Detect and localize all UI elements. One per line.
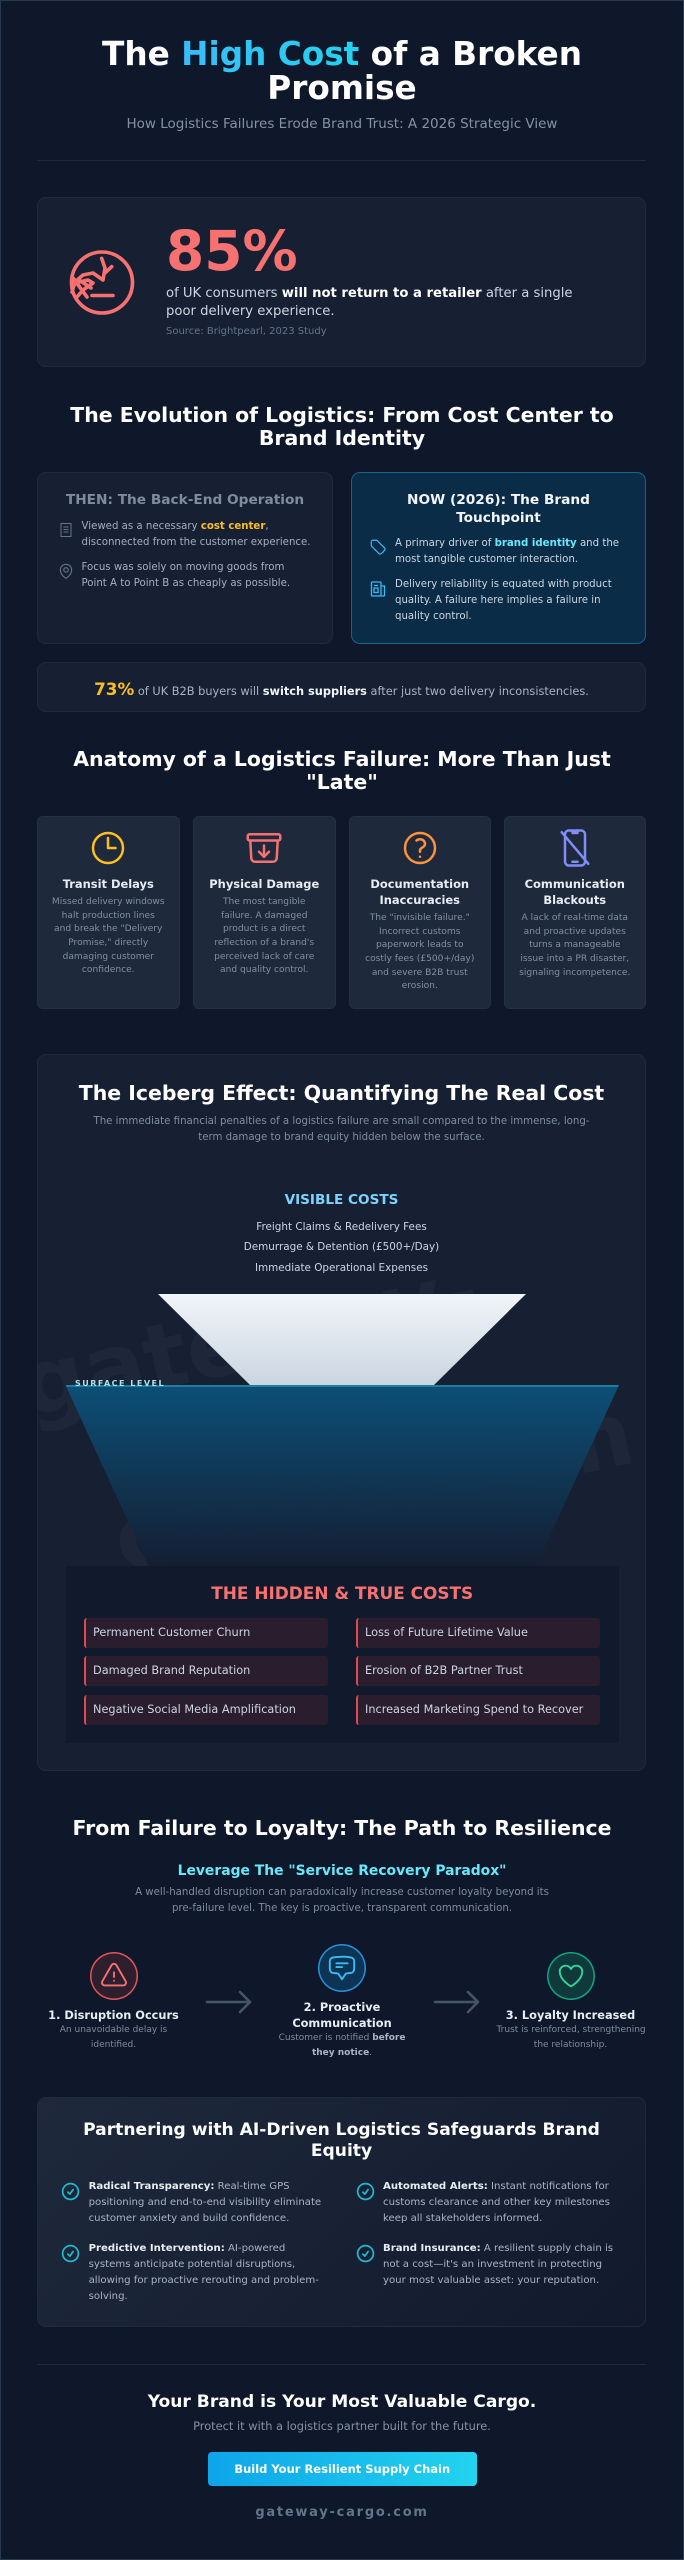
card text: signaling incompetence. [519, 968, 630, 978]
card: transit delays [37, 816, 180, 1009]
then item 1: Viewed as a necessary cost center, [82, 520, 269, 532]
then heading: THEN: The Back-End Operation [66, 492, 304, 508]
card title: Physical Damage [209, 877, 319, 891]
now heading [407, 492, 590, 526]
icon: heart [546, 1952, 594, 2000]
73% statement: 73% of UK B2B buyers will switch suppliers after just two delivery inconsistencies. [94, 679, 589, 699]
hidden cost item [356, 1695, 600, 1725]
hidden cost item: Erosion of B2B Partner Trust [365, 1664, 523, 1677]
now item 1: A primary driver of brand identity and the [395, 538, 619, 549]
now item 2: quality. A failure here implies a failure in [395, 595, 601, 606]
panel: 85% hero statistic [37, 197, 646, 367]
heading: anatomy of a failure [73, 746, 611, 794]
icon: clock [92, 832, 124, 864]
card: physical damage [193, 816, 336, 1009]
card text: and proactive updates [524, 927, 626, 937]
hidden cost item: Negative Social Media Amplification [93, 1703, 296, 1716]
then item 1 [82, 520, 311, 548]
heading: path to resilience: From Failure to Loyalty: The Path to Resilience [72, 1816, 612, 1840]
visible costs list [244, 1221, 439, 1274]
closing subheading: Protect it with a logistics partner built for the future. [193, 2419, 491, 2433]
now item 1: most tangible customer interaction. [395, 554, 578, 565]
surface level label: SURFACE LEVEL [75, 1379, 165, 1388]
heading: evolution of logistics [70, 402, 614, 450]
card text: turns a manageable [529, 940, 620, 950]
heading: evolution of logistics: The Evolution of Logistics: From Cost Center to [70, 402, 614, 426]
submerged iceberg [66, 1385, 619, 1566]
panel: then [37, 472, 333, 644]
service recovery subheading: Leverage The "Service Recovery Paradox" [178, 1863, 506, 1879]
step 3: loyalty increased [496, 1952, 646, 2050]
panel: AI-driven logistics [37, 2097, 646, 2327]
partner heading: Equity [311, 2140, 372, 2160]
watermark: cargo.com [104, 1380, 643, 1593]
step 2: proactive communication [279, 1944, 406, 2058]
iceberg description: The immediate financial penalties of a logistics failure are small compared to the immense, long- [93, 1116, 590, 1127]
card text: erosion. [402, 981, 438, 991]
step title: 3. Loyalty Increased [506, 2008, 635, 2022]
closing heading: Your Brand is Your Most Valuable Cargo. [148, 2392, 536, 2412]
card text: The "invisible failure." [370, 913, 470, 923]
step 1: disruption [48, 1952, 179, 2050]
card: communication blackouts [504, 816, 646, 1009]
hidden cost item [356, 1618, 600, 1648]
predictive intervention: systems anticipate potential disruptions, [89, 2259, 295, 2270]
visible costs list: Immediate Operational Expenses [255, 1262, 428, 1274]
icon: check [354, 2180, 376, 2202]
card text: Missed delivery windows [52, 897, 165, 907]
card text: confidence. [82, 965, 135, 975]
automated alerts: Automated Alerts: Instant notifications for [383, 2181, 609, 2192]
step text: Trust is reinforced, strengthening [496, 2025, 646, 2035]
iceberg description [93, 1116, 590, 1143]
icon: warning [90, 1952, 138, 2000]
call to action button: Build Your Resilient Supply Chain [234, 2462, 450, 2476]
card text: issue into a PR disaster, [520, 954, 629, 964]
now heading: NOW (2026): The Brand [407, 492, 590, 508]
then item 2 [82, 562, 290, 588]
partner heading: Partnering with AI-Driven Logistics Safeguards Brand [83, 2120, 600, 2140]
card text: paperwork leads to [376, 940, 464, 950]
card title: Blackouts [543, 893, 606, 907]
brand insurance: your most valuable asset: your reputation. [383, 2275, 599, 2286]
card text [519, 913, 630, 978]
arrow [206, 1990, 252, 2014]
website domain: gateway-cargo.com [255, 2505, 429, 2520]
icon: check [354, 2242, 376, 2264]
card title: Inaccuracies [380, 893, 460, 907]
card title [370, 877, 469, 907]
heading: anatomy of a failure: "Late" [306, 770, 378, 794]
now item 2 [395, 579, 612, 622]
big number 85%: 85% [166, 219, 298, 283]
radical transparency: Radical Transparency: Real-time GPS [89, 2181, 290, 2192]
predictive intervention: allowing for proactive rerouting and problem- [89, 2275, 319, 2286]
header title: Promise [267, 69, 417, 107]
card: documentation inaccuracies [348, 816, 491, 1009]
card title: Documentation [370, 877, 469, 891]
icon: map pin [60, 564, 72, 579]
card text: reflection of a brand's [214, 938, 314, 948]
icon: question mark [404, 832, 436, 864]
card text: perceived lack of care [214, 952, 314, 962]
card text: halt production lines [62, 911, 155, 921]
card text: A lack of real-time data [522, 913, 628, 923]
icon: phone with slash [560, 829, 590, 867]
then item 2: Point A to Point B as cheaply as possible. [82, 578, 290, 588]
card text [365, 913, 474, 991]
now item 2: Delivery reliability is equated with product [395, 579, 612, 590]
brand insurance [383, 2241, 613, 2289]
card text: Promise," directly [68, 938, 148, 948]
hidden cost item [84, 1618, 328, 1648]
card text: and severe B2B trust [372, 968, 468, 978]
icon: broken face [70, 250, 134, 315]
card text [52, 897, 165, 975]
then item 1: disconnected from the customer experience. [82, 536, 311, 548]
card title: Transit Delays [63, 877, 154, 891]
heading: anatomy of a failure: Anatomy of a Logistics Failure: More Than Just [73, 746, 611, 770]
icon: tag [370, 540, 386, 555]
card text: damaging customer [63, 952, 154, 962]
hidden costs heading: THE HIDDEN & TRUE COSTS [211, 1583, 473, 1603]
visible costs heading: VISIBLE COSTS [285, 1192, 398, 1208]
call to action button [208, 2452, 476, 2486]
panel: now [351, 472, 646, 644]
icon: check [60, 2180, 80, 2202]
header title: The High Cost of a Broken [102, 35, 582, 73]
step text: the relationship. [534, 2040, 607, 2050]
hidden cost item: Increased Marketing Spend to Recover [365, 1703, 583, 1716]
visible costs [244, 1192, 439, 1274]
step title: 1. Disruption Occurs [48, 2008, 179, 2022]
step text [279, 2033, 406, 2058]
header subtitle: How Logistics Failures Erode Brand Trust: A 2026 Strategic View [127, 116, 557, 132]
step text [60, 2025, 167, 2050]
step title: 2. Proactive [304, 2000, 380, 2014]
service recovery description: pre-failure level. The key is proactive, transparent communication. [172, 1903, 512, 1914]
card text: failure. A damaged [221, 911, 308, 921]
icon: chat bubble [318, 1944, 366, 1992]
radical transparency: customer anxiety and build confidence. [89, 2213, 289, 2224]
header title [102, 35, 582, 107]
card text: and break the "Delivery [54, 924, 162, 934]
automated alerts: keep all stakeholders informed. [383, 2213, 542, 2224]
visible costs list: Demurrage & Detention (£500+/Day) [244, 1241, 439, 1253]
hidden cost item [84, 1656, 328, 1686]
hero statement [166, 286, 573, 319]
card title: Communication [525, 877, 625, 891]
card text [214, 897, 314, 975]
partner heading [83, 2120, 600, 2160]
step text [496, 2025, 646, 2050]
visible costs list: Freight Claims & Redelivery Fees [256, 1221, 427, 1233]
predictive intervention: Predictive Intervention: AI-powered [89, 2243, 285, 2254]
card title [525, 877, 625, 907]
automated alerts [383, 2179, 610, 2227]
step text: identified. [91, 2040, 136, 2050]
now heading: Touchpoint [456, 510, 541, 526]
arrow [434, 1990, 480, 2014]
hero statement: poor delivery experience. [166, 304, 335, 319]
now item 2: quality control. [395, 611, 472, 622]
step text: An unavoidable delay is [60, 2025, 167, 2035]
brand insurance: Brand Insurance: A resilient supply chain is [383, 2243, 613, 2254]
hero source: Source: Brightpearl, 2023 Study [166, 326, 327, 337]
panel: iceberg effect [37, 1054, 646, 1771]
step title [292, 2000, 392, 2030]
then item 2: Focus was solely on moving goods from [82, 562, 284, 572]
predictive intervention: solving. [89, 2291, 128, 2302]
panel: 73% statistic bar [37, 662, 646, 712]
card text: Incorrect customs [379, 927, 460, 937]
panel: hidden costs [66, 1566, 619, 1743]
automated alerts: customs clearance and other key milestones [383, 2197, 610, 2208]
heading: evolution of logistics: Brand Identity [259, 426, 425, 450]
iceberg description: term damage to brand equity hidden below the surface. [198, 1132, 485, 1143]
hidden cost item: Permanent Customer Churn [93, 1626, 250, 1639]
service recovery description: A well-handled disruption can paradoxically increase customer loyalty beyond its [135, 1887, 549, 1898]
radical transparency [89, 2179, 321, 2227]
radical transparency: positioning and end-to-end visibility eliminate [89, 2197, 321, 2208]
card text: product is a direct [223, 924, 305, 934]
now item 1 [395, 538, 619, 565]
brand insurance: not a cost—it's an investment in protecting [383, 2259, 602, 2270]
icon: damaged box [246, 833, 282, 863]
step text: Customer is notified before [279, 2033, 405, 2043]
service recovery description [135, 1887, 549, 1914]
iceberg tip [158, 1294, 526, 1385]
predictive intervention [89, 2241, 319, 2305]
iceberg heading: The Iceberg Effect: Quantifying The Real Cost [79, 1080, 604, 1104]
icon: newspaper [370, 581, 386, 597]
card text: The most tangible [223, 897, 306, 907]
icon: document [60, 523, 72, 537]
watermark [37, 1054, 646, 1771]
card text: and quality control. [220, 965, 308, 975]
hero statement: of UK consumers will not return to a retailer after a single [166, 286, 573, 301]
hidden cost item: Damaged Brand Reputation [93, 1664, 250, 1677]
card text: costly fees (£500+/day) [365, 954, 474, 964]
icon: check [60, 2242, 80, 2264]
hidden cost item [356, 1656, 600, 1686]
hidden cost item [84, 1695, 328, 1725]
hidden cost item: Loss of Future Lifetime Value [365, 1626, 528, 1639]
step title: Communication [292, 2016, 392, 2030]
step text: they notice. [312, 2048, 372, 2058]
